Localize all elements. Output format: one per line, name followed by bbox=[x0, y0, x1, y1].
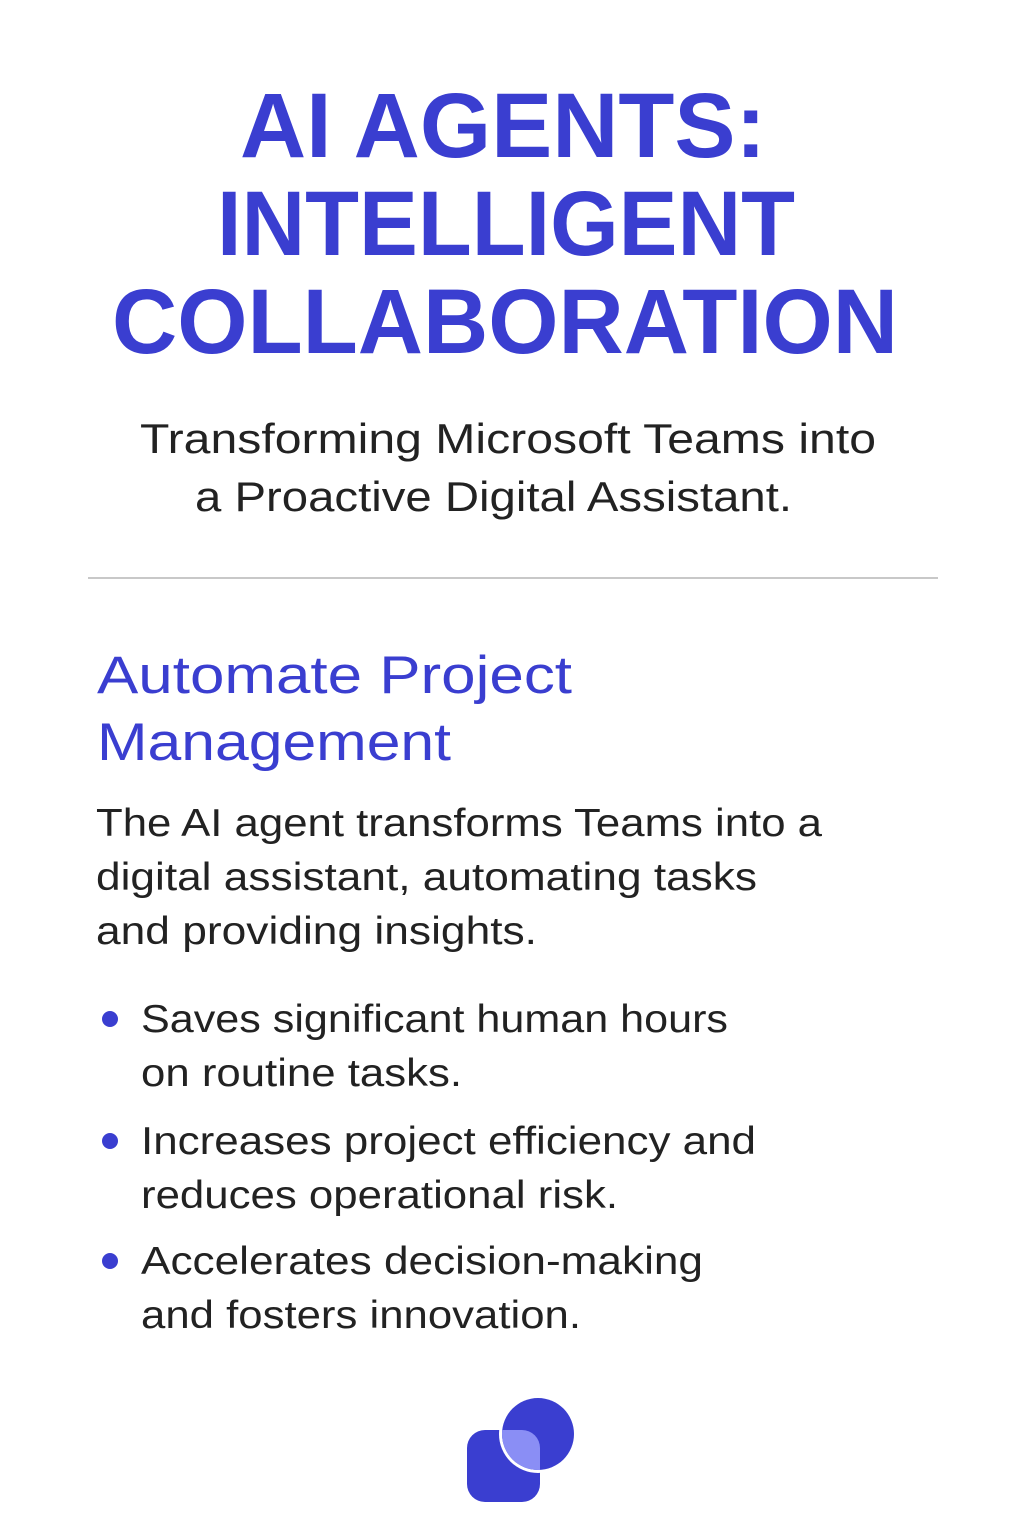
section heading bbox=[97, 646, 572, 772]
body text: digital assistant, automating tasks bbox=[96, 856, 757, 899]
bullet 3 bbox=[102, 1240, 703, 1337]
bullet 1 bbox=[102, 998, 728, 1095]
body text: The AI agent transforms Teams into a bbox=[96, 802, 822, 845]
section heading: Management bbox=[97, 713, 451, 772]
title: AI AGENTS: bbox=[240, 75, 766, 177]
bullet 1: on routine tasks. bbox=[141, 1052, 462, 1095]
icon: logo bbox=[467, 1398, 574, 1502]
subtitle bbox=[140, 415, 876, 520]
bullet 1: Saves significant human hours bbox=[141, 998, 728, 1041]
title: INTELLIGENT bbox=[217, 173, 795, 275]
bullet 2: reduces operational risk. bbox=[141, 1174, 618, 1217]
subtitle: Transforming Microsoft Teams into bbox=[140, 415, 876, 462]
bullet 2 bbox=[102, 1120, 756, 1217]
title bbox=[112, 75, 898, 373]
bullet list bbox=[102, 998, 756, 1337]
title: COLLABORATION bbox=[112, 271, 898, 373]
bullet 3: and fosters innovation. bbox=[141, 1294, 581, 1337]
section heading: Automate Project bbox=[97, 646, 572, 705]
bullet 3: Accelerates decision-making bbox=[141, 1240, 703, 1283]
subtitle: a Proactive Digital Assistant. bbox=[195, 473, 792, 520]
bullet 2: Increases project efficiency and bbox=[141, 1120, 756, 1163]
body text bbox=[96, 802, 822, 953]
body text: and providing insights. bbox=[96, 910, 537, 953]
